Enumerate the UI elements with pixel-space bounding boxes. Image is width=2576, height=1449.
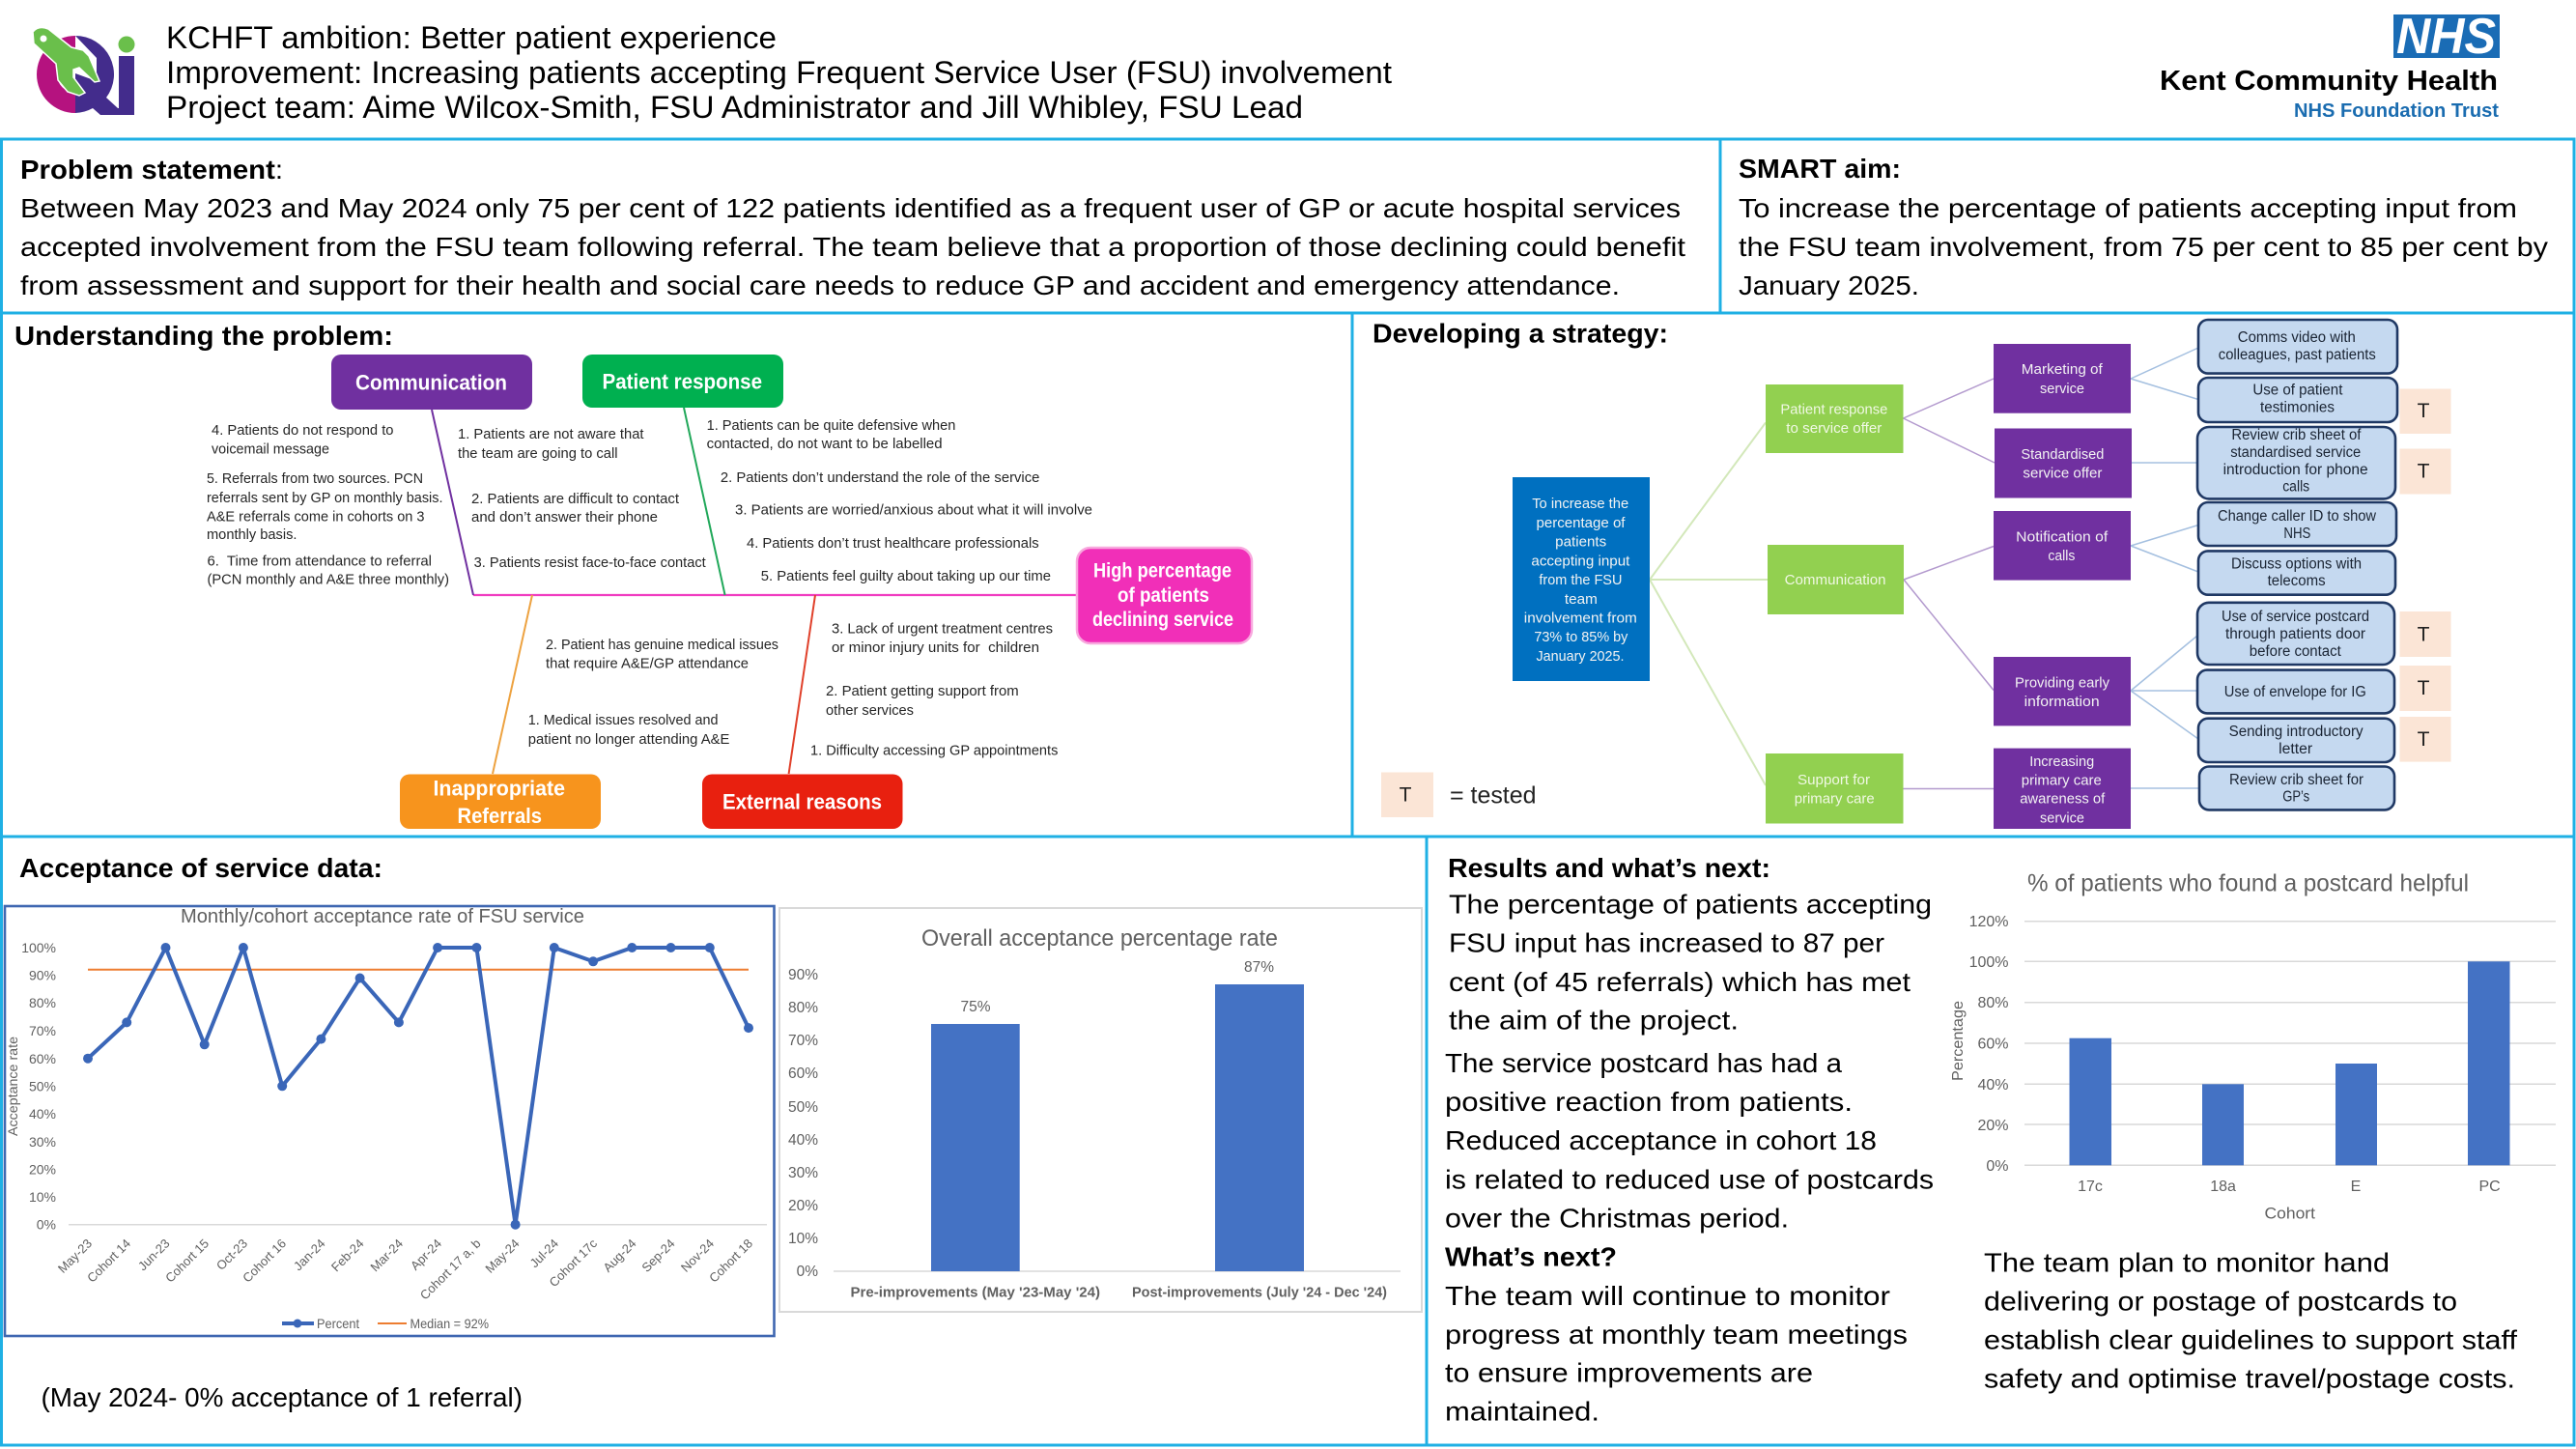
x axis labels xyxy=(55,1236,755,1302)
box: notification of calls xyxy=(1994,511,2131,581)
y axis labels: 90% xyxy=(29,968,56,983)
connectors: secondary drivers to ideas xyxy=(2131,348,2198,788)
text: inappropriate referral causes xyxy=(528,638,778,748)
idea: envelope xyxy=(2197,670,2394,713)
box: Inappropriate Referrals: Referrals xyxy=(458,804,542,828)
text: communication causes: (PCN monthly and A&E three monthly) xyxy=(207,573,449,588)
y axis title: Acceptance rate xyxy=(5,1037,20,1136)
y axis labels xyxy=(21,940,56,1233)
box: High percentage of patients declining service xyxy=(1077,548,1252,643)
text: team plan: delivering or postage of postcards to xyxy=(1984,1287,2457,1317)
box: Inappropriate Referrals: Inappropriate xyxy=(433,777,565,800)
x axis labels: May-23 xyxy=(55,1236,95,1276)
text: results: the aim of the project. xyxy=(1449,1006,1739,1036)
text: SMART aim body: January 2025. xyxy=(1739,270,1919,300)
idea: comms video xyxy=(2198,320,2397,374)
y axis labels: 0% xyxy=(797,1264,818,1280)
category labels xyxy=(2078,1179,2501,1195)
x axis labels: Cohort 17c xyxy=(547,1236,600,1290)
y axis labels xyxy=(788,967,818,1280)
tested marker: crib sheet xyxy=(2399,448,2451,495)
idea: patient testimonies xyxy=(2198,378,2397,422)
bar chart: postcard helpful xyxy=(1950,870,2556,1223)
text: inappropriate referral causes: 2. Patient has genuine medical issues xyxy=(546,638,778,653)
heading: understanding the problem: Understanding the problem: xyxy=(14,321,393,351)
text: team plan: establish clear guidelines to support staff xyxy=(1984,1325,2517,1355)
connectors: primary to secondary drivers xyxy=(1903,379,1995,788)
icon: NHS logo: NHS xyxy=(2396,9,2496,65)
text: problem statement body: from assessment and support for their health and social care needs to reduce GP and accident and emergency attendance. xyxy=(20,270,1620,300)
tested marker: letter xyxy=(2399,717,2451,762)
title block xyxy=(166,20,1392,125)
text: SMART aim body: the FSU team involvement, from 75 per cent to 85 per cent by xyxy=(1739,232,2548,262)
bar: pre-improvements 75%: 75% xyxy=(960,999,991,1015)
x axis labels: Jan-24 xyxy=(291,1236,328,1273)
box: notification of calls: calls xyxy=(2048,548,2075,564)
x axis labels: Aug-24 xyxy=(600,1236,639,1275)
y axis labels: 50% xyxy=(788,1099,818,1116)
tested marker: crib sheet: T xyxy=(2418,461,2430,483)
median line xyxy=(88,969,749,971)
text: communication causes: A&E referrals come in cohorts on 3 xyxy=(207,510,425,526)
title block: Improvement: Increasing patients accepting Frequent Service User (FSU) involvement xyxy=(166,55,1392,90)
idea: service postcard: through patients door xyxy=(2225,626,2365,642)
x axis labels: Sep-24 xyxy=(638,1236,678,1275)
category labels: Pre-improvements (May '23-May '24) xyxy=(850,1285,1100,1301)
heading: what's next: What’s next? xyxy=(1445,1242,1617,1271)
y axis labels: 0% xyxy=(37,1217,56,1233)
category labels: 17c xyxy=(2078,1179,2103,1195)
bars xyxy=(2069,961,2509,1165)
tested marker: envelope xyxy=(2399,666,2451,711)
box: aim: involvement from xyxy=(1524,611,1637,626)
bone: patient response xyxy=(684,408,725,595)
connectors: aim to primary drivers xyxy=(1650,423,1768,785)
panel: understanding the problem xyxy=(2,313,1352,837)
box: aim: January 2025. xyxy=(1536,648,1625,665)
text: communication causes xyxy=(207,423,706,588)
text: communication causes: 3. Patients resist face-to-face contact xyxy=(474,555,706,571)
y axis labels xyxy=(1969,914,2009,1175)
text: postcard reaction: is related to reduced use of postcards xyxy=(1445,1164,1934,1194)
text: external reason causes: 3. Lack of urgent treatment centres xyxy=(832,621,1053,637)
text: communication causes: monthly basis. xyxy=(207,527,297,543)
text: problem statement body: Between May 2023 and May 2024 only 75 per cent of 122 patients identified as a frequent user of GP or acute hospital services xyxy=(20,193,1681,223)
box: patient response to service offer: to service offer xyxy=(1786,420,1882,437)
heading: acceptance of service data: Acceptance of service data: xyxy=(19,853,382,883)
icon: NHS logo: NHS Foundation Trust xyxy=(2294,100,2499,122)
text: what's next: progress at monthly team meetings xyxy=(1445,1320,1908,1350)
text: team plan: safety and optimise travel/postage costs. xyxy=(1984,1364,2515,1394)
box: High percentage of patients declining service: of patients xyxy=(1118,584,1209,607)
y axis labels: 30% xyxy=(788,1165,818,1181)
text: communication causes: 2. Patients are difficult to contact xyxy=(471,492,679,507)
box: support for primary care xyxy=(1766,753,1903,823)
text: what's next: maintained. xyxy=(1445,1397,1599,1427)
text: what's next: to ensure improvements are xyxy=(1445,1358,1813,1387)
category labels: E xyxy=(2351,1179,2361,1195)
idea: review crib sheet xyxy=(2197,427,2395,498)
box: External reasons xyxy=(702,775,902,829)
box: Inappropriate Referrals xyxy=(400,775,601,829)
x axis labels: Jul-24 xyxy=(526,1236,561,1270)
category labels: Post-improvements (July '24 - Dec '24) xyxy=(1132,1285,1387,1301)
y axis labels: 90% xyxy=(788,967,818,983)
chart title: % of patients who found a postcard helpful xyxy=(2027,870,2469,897)
y axis labels: 10% xyxy=(788,1231,818,1247)
driver diagram xyxy=(1513,320,2451,829)
text: external reason causes xyxy=(810,621,1058,759)
idea: service postcard: Use of service postcard xyxy=(2222,609,2369,625)
percent series xyxy=(83,943,753,1230)
box: Patient response: Patient response xyxy=(603,369,762,394)
text: postcard reaction: over the Christmas period. xyxy=(1445,1203,1789,1233)
box: aim: percentage of xyxy=(1536,515,1626,531)
x axis labels: Cohort 17 a, b xyxy=(417,1236,484,1302)
box: notification of calls: Notification of xyxy=(2016,529,2109,546)
idea: review crib sheet: standardised service xyxy=(2230,444,2361,461)
box: aim: 73% to 85% by xyxy=(1534,629,1628,645)
idea: change caller ID xyxy=(2198,502,2396,546)
text: results: The percentage of patients accepting xyxy=(1449,889,1932,920)
idea: discuss options xyxy=(2198,551,2395,595)
panel: results and what's next xyxy=(1427,837,2574,1445)
box: marketing of service: service xyxy=(2040,381,2084,397)
bone: external reasons xyxy=(789,595,815,774)
box: patient response to service offer: Patient response xyxy=(1780,402,1887,418)
text: problem statement body: accepted involvement from the FSU team following referral. The team believe that a proportion of those declining could benefit xyxy=(20,232,1685,262)
box: marketing of service: Marketing of xyxy=(2022,361,2104,378)
idea: introductory letter xyxy=(2198,719,2394,762)
idea: change caller ID: Change caller ID to show xyxy=(2218,508,2377,525)
box: communication: Communication xyxy=(1785,572,1886,588)
x axis labels: May-24 xyxy=(482,1236,523,1276)
y axis labels: 30% xyxy=(29,1134,56,1150)
y axis labels: 80% xyxy=(788,1000,818,1016)
heading: results and what's next: Results and what’s next: xyxy=(1448,853,1770,883)
text: postcard reaction: Reduced acceptance in cohort 18 xyxy=(1445,1125,1877,1155)
box: communication xyxy=(1768,545,1904,614)
text: team plan xyxy=(1984,1248,2517,1394)
text: postcard reaction: positive reaction from patients. xyxy=(1445,1087,1853,1117)
box: patient response to service offer xyxy=(1766,384,1903,453)
text: inappropriate referral causes: that require A&E/GP attendance xyxy=(546,657,749,672)
chart legend: Percent xyxy=(317,1316,359,1331)
header xyxy=(33,9,2500,125)
box: High percentage of patients declining service: High percentage xyxy=(1093,560,1231,582)
box: increasing primary care awareness xyxy=(1994,749,2131,829)
box: increasing primary care awareness: primary care xyxy=(2022,773,2102,788)
box: providing early information xyxy=(1994,657,2131,725)
x axis labels: Oct-23 xyxy=(213,1236,250,1273)
y axis labels: 60% xyxy=(29,1051,56,1066)
text: communication causes: and don’t answer their phone xyxy=(471,510,658,526)
idea: patient testimonies: Use of patient xyxy=(2252,383,2343,399)
chart title: Monthly/cohort acceptance rate of FSU service xyxy=(181,906,584,927)
idea: discuss options: telecoms xyxy=(2268,573,2326,589)
bar chart: overall acceptance xyxy=(779,908,1422,1312)
idea: comms video: Comms video with xyxy=(2238,329,2356,346)
title block: Project team: Aime Wilcox-Smith, FSU Administrator and Jill Whibley, FSU Lead xyxy=(166,90,1303,125)
text: external reason causes: other services xyxy=(826,703,914,719)
title block: KCHFT ambition: Better patient experience xyxy=(166,20,777,55)
panel: developing a strategy xyxy=(1352,313,2574,837)
y axis labels: 60% xyxy=(1977,1036,2009,1053)
box: standardised service offer xyxy=(1995,429,2132,498)
text: patient response causes xyxy=(707,418,1092,584)
x axis labels: Feb-24 xyxy=(328,1236,367,1274)
idea: review crib sheet: Review crib sheet of xyxy=(2231,427,2362,443)
text: what's next: The team will continue to monitor xyxy=(1445,1281,1890,1311)
box: support for primary care: primary care xyxy=(1795,790,1875,807)
text: results: cent (of 45 referrals) which has met xyxy=(1449,967,1911,997)
box: Patient response xyxy=(582,355,783,408)
box: aim xyxy=(1513,477,1650,681)
idea: crib sheet for GPs: GP’s xyxy=(2282,788,2309,805)
idea: patient testimonies: testimonies xyxy=(2260,399,2335,415)
panel: problem statement xyxy=(2,139,1720,313)
x axis labels: Cohort 14 xyxy=(84,1236,133,1285)
bar: post-improvements 87%: 87% xyxy=(1244,959,1274,976)
idea: comms video: colleagues, past patients xyxy=(2219,347,2376,363)
text: patient response causes: 3. Patients are worried/anxious about what it will involve xyxy=(735,502,1092,518)
text: communication causes: voicemail message xyxy=(212,442,329,458)
text: results: FSU input has increased to 87 per xyxy=(1449,928,1884,958)
y axis labels: 50% xyxy=(29,1078,56,1094)
bar: pre-improvements 75% xyxy=(931,999,1020,1271)
box: increasing primary care awareness: awareness of xyxy=(2020,791,2106,808)
idea: service postcard: before contact xyxy=(2250,643,2341,660)
y axis labels: 100% xyxy=(21,940,56,955)
text: external reason causes: 2. Patient getting support from xyxy=(826,684,1019,699)
box: aim: patients xyxy=(1555,533,1606,551)
y axis labels: 60% xyxy=(788,1065,818,1082)
x axis title: Cohort xyxy=(2264,1206,2315,1223)
text: patient response causes: 4. Patients don’t trust healthcare professionals xyxy=(747,536,1039,552)
legend: tested: T xyxy=(1400,783,1412,806)
box: standardised service offer: Standardised xyxy=(2021,446,2104,463)
icon: NHS logo: Kent Community Health xyxy=(2160,66,2498,97)
heading: problem statement: Problem statement : xyxy=(20,155,283,185)
text: communication causes: 1. Patients are not aware that xyxy=(458,427,643,442)
x axis labels: Mar-24 xyxy=(367,1236,406,1274)
legend: tested: = tested xyxy=(1450,781,1536,809)
heading: SMART aim: SMART aim: xyxy=(1739,154,1901,184)
text: team plan: The team plan to monitor hand xyxy=(1984,1248,2390,1278)
box: External reasons: External reasons xyxy=(722,790,882,813)
text: results xyxy=(1449,889,1932,1036)
y axis labels: 20% xyxy=(29,1161,56,1177)
icon: NHS logo xyxy=(2160,9,2500,122)
fishbone spine xyxy=(473,594,1076,596)
idea: change caller ID: NHS xyxy=(2283,526,2310,542)
idea: service postcard xyxy=(2197,603,2394,665)
x axis labels: Cohort 15 xyxy=(162,1236,212,1285)
box: marketing of service xyxy=(1994,344,2131,413)
box: aim: To increase the xyxy=(1532,496,1628,512)
text: problem statement body xyxy=(20,193,1685,300)
box: standardised service offer: service offer xyxy=(2023,466,2102,482)
text: patient response causes: 1. Patients can be quite defensive when xyxy=(707,418,955,434)
text: external reason causes: or minor injury units for children xyxy=(832,640,1039,656)
idea: discuss options: Discuss options with xyxy=(2231,556,2362,573)
y axis labels: 70% xyxy=(788,1033,818,1049)
text: inappropriate referral causes: patient no longer attending A&E xyxy=(528,732,730,748)
y axis labels: 100% xyxy=(1969,954,2009,971)
tested marker: testimonies xyxy=(2399,388,2451,434)
text: SMART aim body: To increase the percentage of patients accepting input from xyxy=(1739,193,2517,223)
idea: review crib sheet: introduction for phone xyxy=(2223,462,2368,478)
tested marker: postcard xyxy=(2399,611,2451,657)
text: postcard reaction: The service postcard has had a xyxy=(1445,1048,1842,1078)
bone: communication xyxy=(432,410,473,595)
text: communication causes: 6. Time from attendance to referral xyxy=(207,554,432,570)
line chart: monthly acceptance xyxy=(5,906,775,1336)
text: communication causes: 4. Patients do not respond to xyxy=(212,423,394,439)
text: communication causes: the team are going to call xyxy=(458,446,618,462)
box: aim: from the FSU xyxy=(1539,572,1622,588)
y axis labels: 70% xyxy=(29,1023,56,1038)
box: increasing primary care awareness: service xyxy=(2040,810,2084,826)
y axis title: Percentage xyxy=(1950,1001,1967,1081)
y axis labels: 80% xyxy=(29,995,56,1010)
tested marker: envelope: T xyxy=(2418,677,2430,699)
category labels xyxy=(850,1285,1387,1301)
text: inappropriate referral causes: 1. Medical issues resolved and xyxy=(528,713,719,728)
fishbone diagram xyxy=(207,355,1252,829)
text: postcard reaction xyxy=(1445,1048,1934,1233)
text: communication causes: referrals sent by GP on monthly basis. xyxy=(207,491,442,506)
tested marker: postcard: T xyxy=(2418,624,2430,646)
panel: SMART aim xyxy=(1720,139,2574,313)
chart legend: Median = 92% xyxy=(410,1316,489,1331)
box: increasing primary care awareness: Increasing xyxy=(2029,753,2094,770)
gridlines xyxy=(2024,922,2556,1165)
panel: acceptance of service data xyxy=(2,837,1427,1445)
box: aim: team xyxy=(1565,591,1598,608)
box: High percentage of patients declining service: declining service xyxy=(1092,609,1233,631)
y axis labels: 40% xyxy=(1977,1077,2009,1094)
tested marker: letter: T xyxy=(2418,728,2430,751)
category labels: 18a xyxy=(2210,1179,2236,1195)
x axis labels: Cohort 18 xyxy=(706,1236,755,1285)
text: patient response causes: 2. Patients don’t understand the role of the service xyxy=(721,470,1039,486)
box: support for primary care: Support for xyxy=(1798,772,1870,788)
idea: review crib sheet: calls xyxy=(2282,479,2309,496)
y axis labels: 40% xyxy=(29,1106,56,1122)
y axis labels: 40% xyxy=(788,1132,818,1149)
heading: developing a strategy: Developing a strategy: xyxy=(1373,319,1668,348)
text: what's next xyxy=(1445,1281,1908,1427)
text: communication causes: 5. Referrals from two sources. PCN xyxy=(207,471,423,487)
category labels: PC xyxy=(2478,1179,2501,1195)
icon: QI logo xyxy=(33,28,135,115)
idea: introductory letter: Sending introductory xyxy=(2229,724,2364,740)
x axis labels: Apr-24 xyxy=(408,1236,444,1273)
chart title: Overall acceptance percentage rate xyxy=(921,925,1278,952)
box: Communication xyxy=(331,355,532,410)
bone: inappropriate referrals xyxy=(493,595,532,774)
text: patient response causes: contacted, do not want to be labelled xyxy=(707,437,943,452)
y axis labels: 20% xyxy=(788,1198,818,1214)
y axis labels: 120% xyxy=(1969,914,2009,930)
tested marker: testimonies: T xyxy=(2418,400,2430,422)
y axis labels: 20% xyxy=(1977,1118,2009,1134)
x axis labels: Cohort 16 xyxy=(240,1236,289,1285)
text: SMART aim body xyxy=(1739,193,2548,300)
y axis labels: 10% xyxy=(29,1189,56,1205)
box: aim: accepting input xyxy=(1531,553,1630,570)
idea: crib sheet for GPs xyxy=(2199,767,2394,810)
idea: envelope: Use of envelope for IG xyxy=(2224,684,2366,700)
y axis labels: 80% xyxy=(1977,995,2009,1011)
text: patient response causes: 5. Patients feel guilty about taking up our time xyxy=(761,569,1051,584)
x axis labels: Nov-24 xyxy=(678,1236,717,1275)
x axis labels: Jun-23 xyxy=(135,1236,173,1273)
y axis labels: 0% xyxy=(1986,1158,2009,1175)
box: providing early information: Providing early xyxy=(2015,674,2109,691)
text: external reason causes: 1. Difficulty accessing GP appointments xyxy=(810,744,1058,759)
legend: tested xyxy=(1381,773,1536,817)
box: Communication: Communication xyxy=(355,371,507,394)
bar: post-improvements 87% xyxy=(1215,959,1304,1271)
note: May 2024: (May 2024- 0% acceptance of 1 referral) xyxy=(41,1382,523,1412)
idea: crib sheet for GPs: Review crib sheet for xyxy=(2229,772,2364,788)
box: providing early information: information xyxy=(2024,694,2100,710)
chart legend xyxy=(282,1316,489,1331)
idea: introductory letter: letter xyxy=(2279,741,2312,757)
